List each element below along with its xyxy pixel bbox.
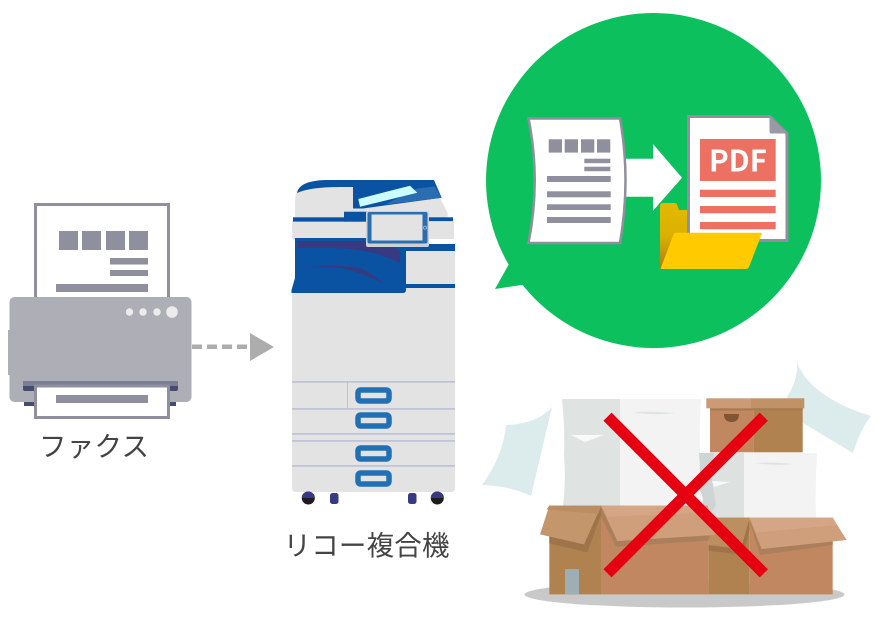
shadow under boxes xyxy=(524,582,844,608)
flying paper right xyxy=(787,363,871,453)
copier xyxy=(292,180,455,504)
fax input paper xyxy=(36,204,168,304)
PDF document icon xyxy=(688,116,788,240)
arrow: fax to copier xyxy=(192,333,274,361)
fax body xyxy=(8,297,192,406)
fax label: ファクス xyxy=(39,431,149,462)
copier drawer handles xyxy=(358,390,389,484)
green speech bubble xyxy=(486,13,821,348)
copier blue front panel xyxy=(292,238,455,314)
copier wheels xyxy=(302,492,444,504)
folder front xyxy=(661,233,762,269)
flying paper left xyxy=(482,407,552,496)
PDF label box: PDF xyxy=(709,139,767,181)
large open box left xyxy=(540,506,715,594)
folder back xyxy=(660,203,690,269)
small cardboard box with lid xyxy=(706,398,804,452)
large open box right xyxy=(708,518,847,594)
red cross xyxy=(608,417,764,573)
copier label: リコー複合機 xyxy=(284,530,450,561)
copier touch panel xyxy=(366,211,429,247)
fax document icon xyxy=(528,118,626,243)
fax machine xyxy=(8,204,192,418)
fax output paper xyxy=(36,386,168,418)
copier top and scanner xyxy=(292,180,454,239)
paper stack right xyxy=(699,453,817,518)
paper stack left xyxy=(562,399,701,507)
box shipping label xyxy=(565,569,579,594)
copier lower body with drawers xyxy=(292,288,455,492)
white arrow: document to PDF xyxy=(625,144,682,211)
